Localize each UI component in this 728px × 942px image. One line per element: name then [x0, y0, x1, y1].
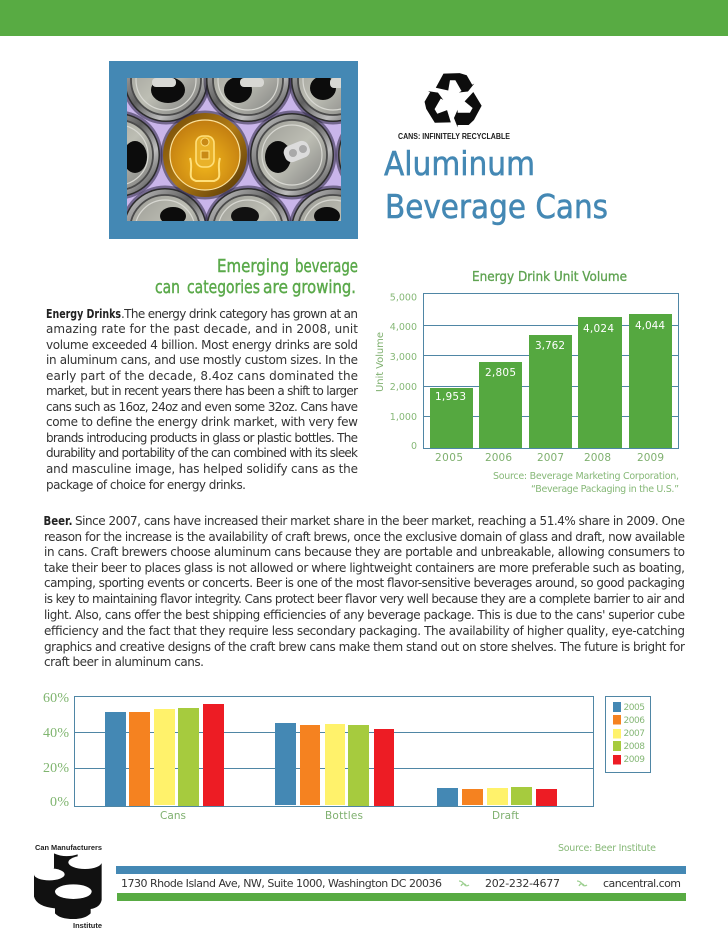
footer contact bar — [116, 866, 686, 901]
text block: energy drinks: market, but in recent years there has been a shift to larger — [46, 384, 358, 398]
text block: energy drinks: package of choice for energy drinks. — [46, 478, 246, 492]
y axis labels: 0% — [50, 795, 69, 810]
bars: bottles — [275, 723, 394, 806]
y axis labels: 1,000 — [390, 412, 417, 423]
heading: emerging categories: categories — [187, 277, 260, 298]
text block: energy drinks: cans such as 16oz, 24oz and even some 32oz. Cans have — [46, 400, 358, 414]
legend: 2005 — [624, 703, 645, 713]
bars — [430, 314, 672, 448]
icon: recycling symbol — [416, 63, 482, 130]
y axis labels: 40% — [43, 726, 69, 741]
year labels: 2009 — [637, 452, 664, 464]
photo of cans — [127, 78, 341, 221]
logo: Can Manufacturers Institute: Can Manufacturers — [35, 843, 102, 852]
text block: beer: reason for the increase is the availability of craft brews, once the exclusive domain of glass and draft, now available — [44, 530, 685, 544]
legend: 2006 — [624, 716, 645, 726]
text block: energy drinks: .The energy drink category has grown at an — [121, 307, 358, 321]
bar values: 4,024 — [583, 323, 614, 335]
bar values: 1,953 — [435, 391, 466, 403]
chart source — [493, 471, 679, 495]
chart title: Energy Drink Unit Volume — [472, 269, 627, 285]
y axis labels: 3,000 — [390, 352, 417, 363]
y axis labels: 5,000 — [390, 292, 417, 304]
y axis labels — [390, 292, 417, 452]
text block: beer: is key to maintaining flavor integrity. Cans protect beer flavor very well because they are a complete barrier to air and — [44, 592, 685, 606]
text block: beer: graphics and creative designs of the craft brew cans make them stand out on store shelves. The future is bright for — [44, 640, 685, 654]
heading: emerging categories: Emerging — [217, 256, 289, 277]
photo frame: aluminum cans — [109, 61, 358, 239]
category labels — [160, 810, 519, 822]
y axis title: Unit Volume — [375, 332, 386, 392]
logo: Can Manufacturers Institute: Institute — [73, 921, 102, 930]
icon: stacked cans — [34, 853, 102, 919]
bars: draft — [437, 787, 557, 806]
legend — [606, 696, 650, 772]
y axis labels: 2,000 — [390, 382, 417, 393]
heading: emerging categories: beverage — [295, 256, 358, 277]
legend: 2009 — [624, 755, 645, 765]
text block: energy drinks: volume exceeded 4 billion. Most energy drinks are sold — [46, 338, 358, 352]
y axis labels — [43, 691, 69, 810]
text block: energy drinks: brands introducing products in glass or plastic bottles. The — [46, 431, 358, 445]
year labels: 2006 — [485, 452, 512, 464]
bar chart: energy drink unit volume — [375, 269, 679, 495]
text block: energy drinks: and masculine image, has helped solidify cans as the — [46, 462, 358, 476]
text block: beer: camping, sporting events or concerts. Beer is one of the most flavor-sensitive beverages around, so good packaging — [44, 576, 685, 590]
heading: emerging categories: are — [263, 277, 288, 298]
website: cancentral.com — [603, 877, 681, 890]
text block: beer: efficiency and the fact that they require less secondary packaging. The availability of higher quality, eye-catching — [44, 624, 685, 638]
text block: energy drinks: amazing rate for the past decade, and in 2008, unit — [46, 322, 358, 336]
logo: Can Manufacturers Institute — [34, 843, 102, 930]
text block: beer: light. Also, cans offer the best shipping efficiencies of any beverage package. This is due to the cans' superior cube — [44, 608, 685, 622]
bar values: 2,805 — [485, 367, 516, 379]
title: Beverage Cans — [385, 187, 608, 226]
y axis labels: 4,000 — [390, 322, 417, 333]
text block: beer: in cans. Craft brewers choose aluminum cans because they are portable and unbreakable, allowing consumers to — [44, 545, 685, 559]
text block: beer: take their beer to places glass is not allowed or where lightweight containers are more preferable such as boating, — [44, 561, 685, 575]
text block: energy drinks: Energy Drinks — [46, 307, 121, 321]
legend: 2007 — [624, 729, 645, 739]
bar chart: beer package market share — [43, 691, 656, 854]
text block: energy drinks: come to define the energy drink market, with very few — [46, 415, 358, 429]
address: 1730 Rhode Island Ave, NW, Suite 1000, Washington DC 20036 — [121, 877, 442, 890]
text block: beer: Beer. — [44, 513, 72, 528]
year labels: 2008 — [584, 452, 611, 464]
phone: 202-232-4677 — [485, 877, 560, 890]
title: Aluminum — [384, 144, 535, 183]
top green band — [0, 0, 728, 36]
y axis labels: 60% — [43, 691, 69, 706]
year labels: 2005 — [435, 452, 463, 464]
category labels: Draft — [492, 810, 519, 822]
text block: beer — [44, 513, 685, 669]
year labels — [435, 452, 664, 464]
category labels: Bottles — [325, 810, 363, 822]
chart source: “Beverage Packaging in the U.S.” — [531, 484, 679, 495]
icon: ornament — [459, 881, 469, 886]
bar values: 4,044 — [635, 320, 665, 332]
heading: emerging categories: growing. — [292, 277, 356, 298]
text block: energy drinks: durability and portability of the can combined with its sleek — [46, 446, 358, 460]
title — [384, 144, 608, 226]
heading: emerging categories — [155, 256, 358, 298]
heading: emerging categories: can — [155, 277, 180, 298]
text block: energy drinks: early part of the decade, 8.4oz cans dominated the — [46, 369, 358, 383]
legend: 2008 — [624, 742, 645, 752]
bar values: 3,762 — [535, 340, 565, 352]
bars: cans — [105, 704, 224, 806]
text block: beer: craft beer in aluminum cans. — [44, 655, 204, 669]
chart source: Source: Beverage Marketing Corporation, — [493, 471, 679, 482]
category labels: Cans — [160, 810, 186, 822]
text block: beer: Since 2007, cans have increased their market share in the beer market, reaching a 51.4% share in 2009. One — [75, 514, 685, 528]
icon: ornament — [577, 881, 587, 886]
year labels: 2007 — [537, 452, 564, 464]
text block: energy drinks: in aluminum cans, and use mostly custom sizes. In the — [46, 353, 358, 367]
y axis labels: 0 — [411, 441, 417, 452]
recycling tagline: CANS: INFINITELY RECYCLABLE — [398, 132, 511, 141]
chart source: Source: Beer Institute — [558, 843, 656, 854]
bar values — [435, 320, 665, 403]
text block: energy drinks — [46, 307, 358, 492]
y axis labels: 20% — [43, 761, 69, 776]
